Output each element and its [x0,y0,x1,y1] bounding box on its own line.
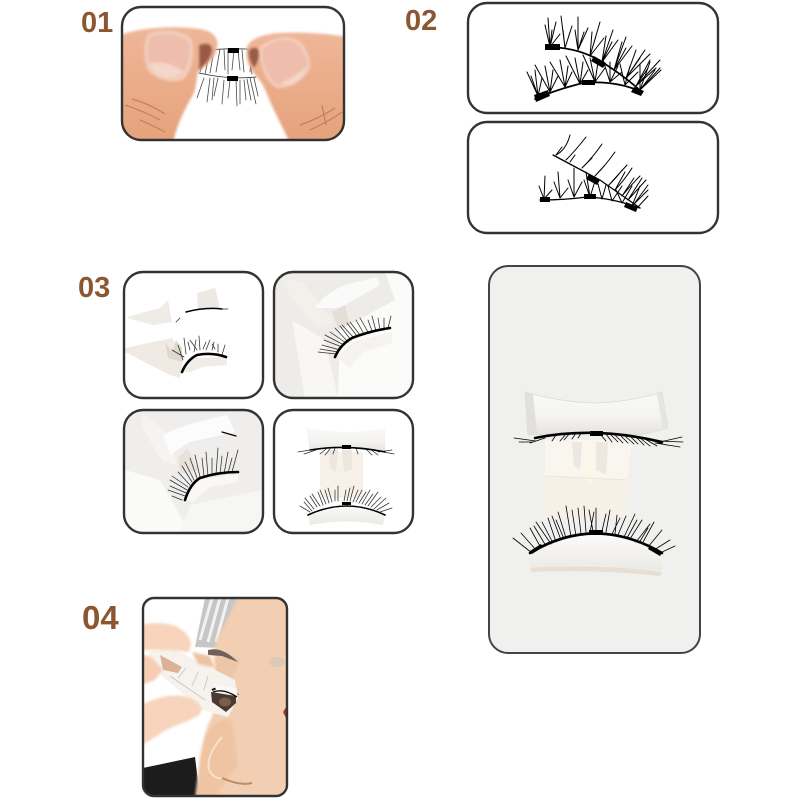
upper lash [545,16,661,90]
background shadow [274,272,395,398]
dark garment [144,757,198,795]
upper holder and lash [305,425,385,452]
stand [545,440,632,517]
panel: step 04 applying lash to eye [141,596,290,798]
panel: step 03 photo C [124,410,263,533]
eye [211,692,236,712]
holder [142,413,177,465]
stand [320,452,363,498]
upper lash [514,432,683,447]
panel: step 03 photo D [274,410,413,533]
panel: step 02 lashes, short style [468,122,718,233]
nose [208,737,222,778]
lash on pad [185,474,238,502]
panel: step 03 photo A [124,272,263,398]
step number 03: 03 [78,272,110,304]
lash on pad [337,332,392,368]
holder [283,278,333,328]
lower lash [513,506,675,553]
step number 02: 02 [405,5,437,37]
panel: large photo of lash on applicator [489,266,700,653]
lower lash [527,55,660,96]
lower holder and lash [125,338,183,378]
hair highlight [195,598,240,648]
panel: step 02 lashes, long style [468,3,718,113]
lower pad and lash [308,505,385,525]
lower pad [528,535,662,571]
upper holder [197,288,220,310]
lash pair held between fingers [197,48,262,106]
left finger [120,27,217,143]
clip applicator [148,648,238,717]
step number 04: 04 [82,599,119,636]
panel: step 03 photo B [274,272,413,398]
right finger [246,33,346,143]
face [195,596,290,798]
upper holder [525,392,668,435]
panel: step 01 fingers holding lash [120,7,346,143]
step number 01: 01 [81,7,113,39]
upper lash [556,135,648,204]
fingers [141,623,215,746]
eyebrow [208,649,238,662]
lower lash [539,168,648,208]
